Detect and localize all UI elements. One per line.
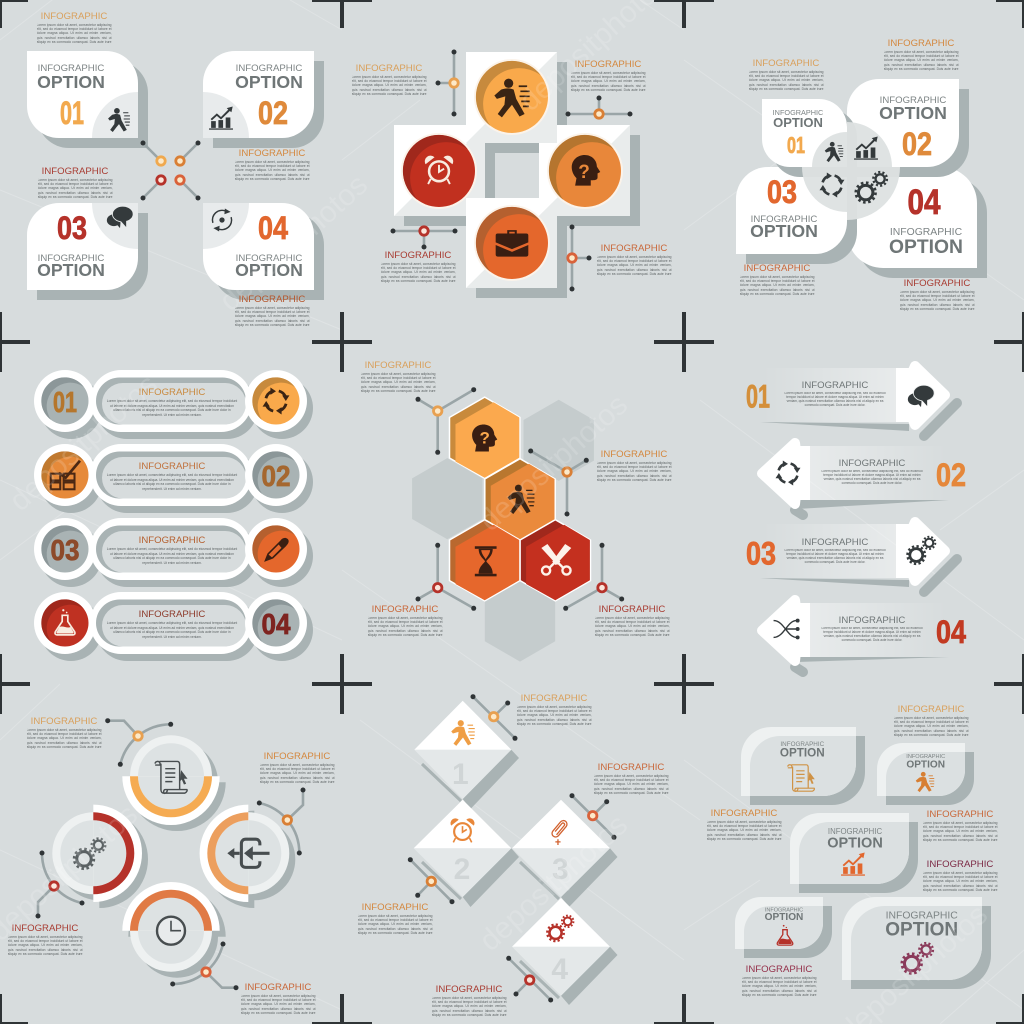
hexagon: hourglass (450, 520, 520, 601)
glass leaf: chart: INFOGRAPHIC (828, 827, 882, 836)
row 04 (34, 592, 313, 661)
text block: panel 3 b: INFOGRAPHIC (888, 38, 954, 49)
text block: panel 2 d: INFOGRAPHIC (601, 243, 667, 254)
row 02 (34, 444, 313, 513)
text block: panel 9 d: INFOGRAPHIC (927, 859, 993, 870)
watermark overlay: depositphotos (473, 808, 634, 958)
text block: panel 7 a (26, 716, 102, 749)
diamond 2 (414, 800, 519, 907)
text block: panel 2 b: INFOGRAPHIC (575, 59, 641, 70)
petal labels: INFOGRAPHIC (880, 95, 946, 106)
grey hexagons (412, 400, 594, 662)
circle: scroll (122, 735, 226, 831)
text block: panel 9 a (894, 704, 968, 737)
circle: clock (122, 882, 226, 978)
glass leaf: scroll: INFOGRAPHIC (780, 741, 825, 748)
text block: panel 3 b (884, 38, 958, 71)
text block: panel 1 b: INFOGRAPHIC (239, 148, 305, 159)
watermark overlay: depositphotos (473, 388, 634, 538)
text block: pill row 4: INFOGRAPHIC (139, 609, 205, 620)
text block: pill row 1 (107, 387, 238, 417)
text block: arrow 2 (822, 458, 922, 485)
text block: panel 7 c: INFOGRAPHIC (12, 923, 78, 934)
text block: panel 5 b (596, 449, 672, 482)
row 02: 02 (262, 461, 290, 493)
text block: panel 8 c (358, 902, 432, 935)
circle: alarm clock (401, 133, 477, 209)
text block: panel 9 b (706, 808, 782, 841)
text block: panel 1 c (38, 166, 112, 199)
arrow 01 (746, 366, 957, 436)
connector nodes (408, 694, 616, 1002)
text block: panel 9 c (922, 809, 998, 842)
arrow 03 (746, 522, 957, 592)
diamond 4: 4 (551, 953, 568, 986)
text block: panel 8 a (516, 693, 592, 726)
text block: panel 1 a (36, 11, 112, 44)
glass leaf: chart (790, 813, 918, 893)
glass leaf: flask: OPTION (765, 912, 803, 923)
text block: panel 8 c: INFOGRAPHIC (362, 902, 428, 913)
center quadrants (802, 122, 900, 220)
text block: panel 2 b (570, 59, 646, 92)
glass leaf: gears: OPTION (885, 920, 958, 941)
petal labels: INFOGRAPHIC (890, 227, 963, 238)
glass leaf: scroll: OPTION (780, 747, 825, 760)
text block: panel 1 c: INFOGRAPHIC (42, 166, 108, 177)
text block: panel 2 c: INFOGRAPHIC (385, 250, 451, 261)
text block: pill row 1: INFOGRAPHIC (139, 387, 205, 398)
text block: panel 3 a (748, 58, 824, 91)
text block: panel 2 a: INFOGRAPHIC (356, 63, 422, 74)
text block: pill row 1: Lorem ipsum dolor sit amet, consectetur adipiscing elit, sed do eiusmod tempor incididunt ut labore et dolore magna aliqua. Ut enim ad minim veniam, quis nostrud exercitation ullamco laboris nisi ut aliquip ex ea commodo consequat. Duis aute irure dolor in reprehenderit. Ut enim ad minim veniam. (107, 399, 237, 417)
text block: panel 3 a: INFOGRAPHIC (753, 58, 819, 69)
panel: four leaf option tiles (27, 51, 324, 300)
tile 01: 01 (60, 95, 84, 131)
text block: panel 3 d: INFOGRAPHIC (904, 278, 970, 289)
row 03 (34, 518, 313, 587)
text block: panel 1 d (234, 294, 310, 327)
text block: panel 2 d (596, 243, 672, 276)
connector nodes (416, 387, 624, 611)
tile 04: OPTION (235, 260, 303, 280)
text block: arrow 2: INFOGRAPHIC (839, 458, 905, 469)
text block: arrow 3 (784, 537, 886, 564)
circle: briefcase (474, 205, 550, 281)
arrow 01: 01 (746, 379, 770, 415)
diamond 2: 2 (454, 853, 470, 886)
text block: panel 8 a: INFOGRAPHIC (521, 693, 587, 704)
panel: four pill rows (34, 370, 313, 661)
tile 02: OPTION (235, 72, 303, 92)
glass leaf: chart: OPTION (827, 835, 883, 851)
text block: pill row 3: Lorem ipsum dolor sit amet, consectetur adipiscing elit, sed do eiusmod tempor incididunt ut labore et dolore magna aliqua. Ut enim ad minim veniam, quis nostrud exercitation ullamco laboris nisi ut aliquip ex ea commodo consequat. Duis aute irure dolor in reprehenderit. Ut enim ad minim veniam. (107, 547, 237, 565)
text block: arrow 1 (784, 380, 886, 407)
text block: panel 5 c (368, 604, 442, 637)
arrow 02 (762, 443, 966, 515)
text block: panel 9 c: INFOGRAPHIC (927, 809, 993, 820)
text block: panel 7 b (260, 751, 334, 784)
row 01 (34, 370, 313, 439)
text block: panel 1 d: INFOGRAPHIC (239, 294, 305, 305)
right square (539, 125, 630, 216)
text block: panel 3 c: INFOGRAPHIC (744, 263, 810, 274)
tile 04: INFOGRAPHIC (236, 253, 302, 264)
tile 01: INFOGRAPHIC (38, 63, 104, 74)
tile 02: INFOGRAPHIC (236, 63, 302, 74)
glass leaf: scroll (741, 727, 865, 805)
tile 03: OPTION (37, 260, 105, 280)
glass leaf: flask (735, 897, 832, 958)
watermark overlay: depositphotos (213, 168, 374, 318)
petal labels: OPTION (879, 103, 947, 123)
text block: panel 9 e: INFOGRAPHIC (746, 964, 812, 975)
square shadows (404, 62, 640, 298)
petal labels: OPTION (750, 221, 818, 241)
hexagon: runner (485, 459, 555, 540)
petal labels: 03 (767, 174, 797, 210)
text block: arrow 1: INFOGRAPHIC (802, 380, 868, 391)
petal labels: 01 (787, 132, 805, 158)
arrow 04 (762, 600, 966, 672)
text block: pill row 4: Lorem ipsum dolor sit amet, consectetur adipiscing elit, sed do eiusmod tempor incididunt ut labore et dolore magna aliqua. Ut enim ad minim veniam, quis nostrud exercitation ullamco laboris nisi ut aliquip ex ea commodo consequat. Duis aute irure dolor in reprehenderit. Ut enim ad minim veniam. (107, 621, 237, 639)
text block: panel 9 e (742, 964, 816, 997)
text block: panel 7 c (8, 923, 82, 956)
petal 01 (762, 99, 857, 177)
glass leaf: gears: INFOGRAPHIC (886, 910, 958, 921)
panel: four diamonds (408, 694, 618, 1005)
arrow 03: 03 (746, 536, 776, 572)
tile 03: INFOGRAPHIC (38, 253, 104, 264)
petal labels: INFOGRAPHIC (751, 214, 817, 225)
text block: panel 7 d (240, 982, 316, 1015)
petal icons (820, 137, 887, 202)
panel: four overlapping petals (736, 79, 987, 278)
text block: pill row 3 (107, 535, 238, 565)
top square (466, 52, 557, 143)
tile 02 (203, 51, 324, 148)
row 01: 01 (53, 387, 77, 419)
text block: pill row 2: INFOGRAPHIC (139, 461, 205, 472)
tile 04: 04 (258, 210, 288, 246)
text block: panel 1 a: INFOGRAPHIC (41, 11, 107, 22)
text block: panel 8 d: INFOGRAPHIC (436, 984, 502, 995)
tile 01: OPTION (37, 72, 105, 92)
petal labels (750, 95, 963, 258)
hexagon: head (450, 397, 520, 478)
watermark overlay: depositphotos (3, 368, 164, 518)
connector nodes (140, 140, 200, 200)
tile 04 (203, 203, 324, 300)
text block: panel 3 c (740, 263, 814, 296)
tile 02: 02 (258, 95, 288, 131)
circle: login (200, 805, 295, 908)
glass leaf: gears (842, 897, 991, 989)
text block: panel 5 b: INFOGRAPHIC (601, 449, 667, 460)
circle: gears (52, 805, 148, 908)
text block: arrow 4 (822, 615, 922, 642)
petal labels: OPTION (773, 115, 823, 130)
text block: panel 7 b: INFOGRAPHIC (264, 751, 330, 762)
tile 01 (27, 51, 148, 148)
text block: panel 1 b (234, 148, 310, 181)
petal 03 (736, 167, 857, 264)
panel: glass leaves (735, 727, 991, 989)
text block: panel 9 b: INFOGRAPHIC (711, 808, 777, 819)
text block: panel 3 d (900, 278, 974, 311)
panel: four squares with circles (390, 50, 640, 298)
text block: panel 2 c (380, 250, 456, 283)
text block: pill row 2: Lorem ipsum dolor sit amet, consectetur adipiscing elit, sed do eiusmod tempor incididunt ut labore et dolore magna aliqua. Ut enim ad minim veniam, quis nostrud exercitation ullamco laboris nisi ut aliquip ex ea commodo consequat. Duis aute irure dolor in reprehenderit. Ut enim ad minim veniam. (107, 473, 237, 491)
connector nodes (390, 50, 632, 292)
text block: panel 5 d: INFOGRAPHIC (599, 604, 665, 615)
glass leaf: runner: INFOGRAPHIC (906, 754, 945, 760)
text block: arrow 4: INFOGRAPHIC (839, 615, 905, 626)
text block: panel 5 c: INFOGRAPHIC (372, 604, 438, 615)
text block: panel 5 a: INFOGRAPHIC (365, 360, 431, 371)
petal 02 (847, 79, 969, 177)
diamond 1: 1 (452, 758, 469, 791)
text block: pill row 4 (107, 609, 238, 639)
row 03: 03 (50, 535, 80, 567)
circle: head question (547, 133, 623, 209)
row 04: 04 (262, 609, 290, 641)
glass leaf: runner: OPTION (906, 759, 945, 770)
petal labels: INFOGRAPHIC (773, 108, 823, 117)
diamond 3 (512, 800, 618, 907)
glass leaf: flask: INFOGRAPHIC (765, 907, 803, 913)
text block: panel 7 a: INFOGRAPHIC (31, 716, 97, 727)
text block: pill row 3: INFOGRAPHIC (139, 535, 205, 546)
petal labels: OPTION (889, 237, 963, 258)
arrow 04: 04 (936, 614, 966, 650)
petal 04 (847, 167, 987, 278)
glass leaf: runner (877, 743, 974, 805)
petal labels: 04 (908, 183, 941, 222)
diamond 1 (414, 701, 519, 809)
text block: panel 2 a (352, 63, 426, 96)
panel: four arrows (746, 366, 966, 672)
text block: pill row 2 (107, 461, 238, 491)
text block: panel 9 a: INFOGRAPHIC (898, 704, 964, 715)
text block: panel 5 d (594, 604, 670, 637)
text block: arrow 3: INFOGRAPHIC (802, 537, 868, 548)
petal labels: 02 (902, 126, 932, 162)
tile 03: 03 (57, 210, 87, 246)
hexagon: head: ? (480, 429, 490, 448)
circle: runner (474, 59, 550, 135)
left square (394, 125, 485, 216)
circle: head question: ? (578, 162, 590, 183)
text block: panel 7 d: INFOGRAPHIC (245, 982, 311, 993)
diamond 3: 3 (552, 853, 569, 886)
text block: panel 8 b: INFOGRAPHIC (598, 762, 664, 773)
text block: panel 8 d (432, 984, 506, 1017)
panel: four half-ring circles (36, 718, 306, 990)
text block: panel 5 a (360, 360, 436, 393)
text block: panel 9 d (922, 859, 998, 892)
panel: hexagon cluster (412, 387, 624, 662)
arrow 02: 02 (936, 457, 966, 493)
text block: panel 8 b (594, 762, 668, 795)
connector nodes (36, 718, 306, 990)
bottom square (466, 198, 557, 288)
diamond 4 (512, 898, 618, 1005)
tile 03 (27, 203, 148, 300)
hexagon: scissors (520, 520, 590, 601)
